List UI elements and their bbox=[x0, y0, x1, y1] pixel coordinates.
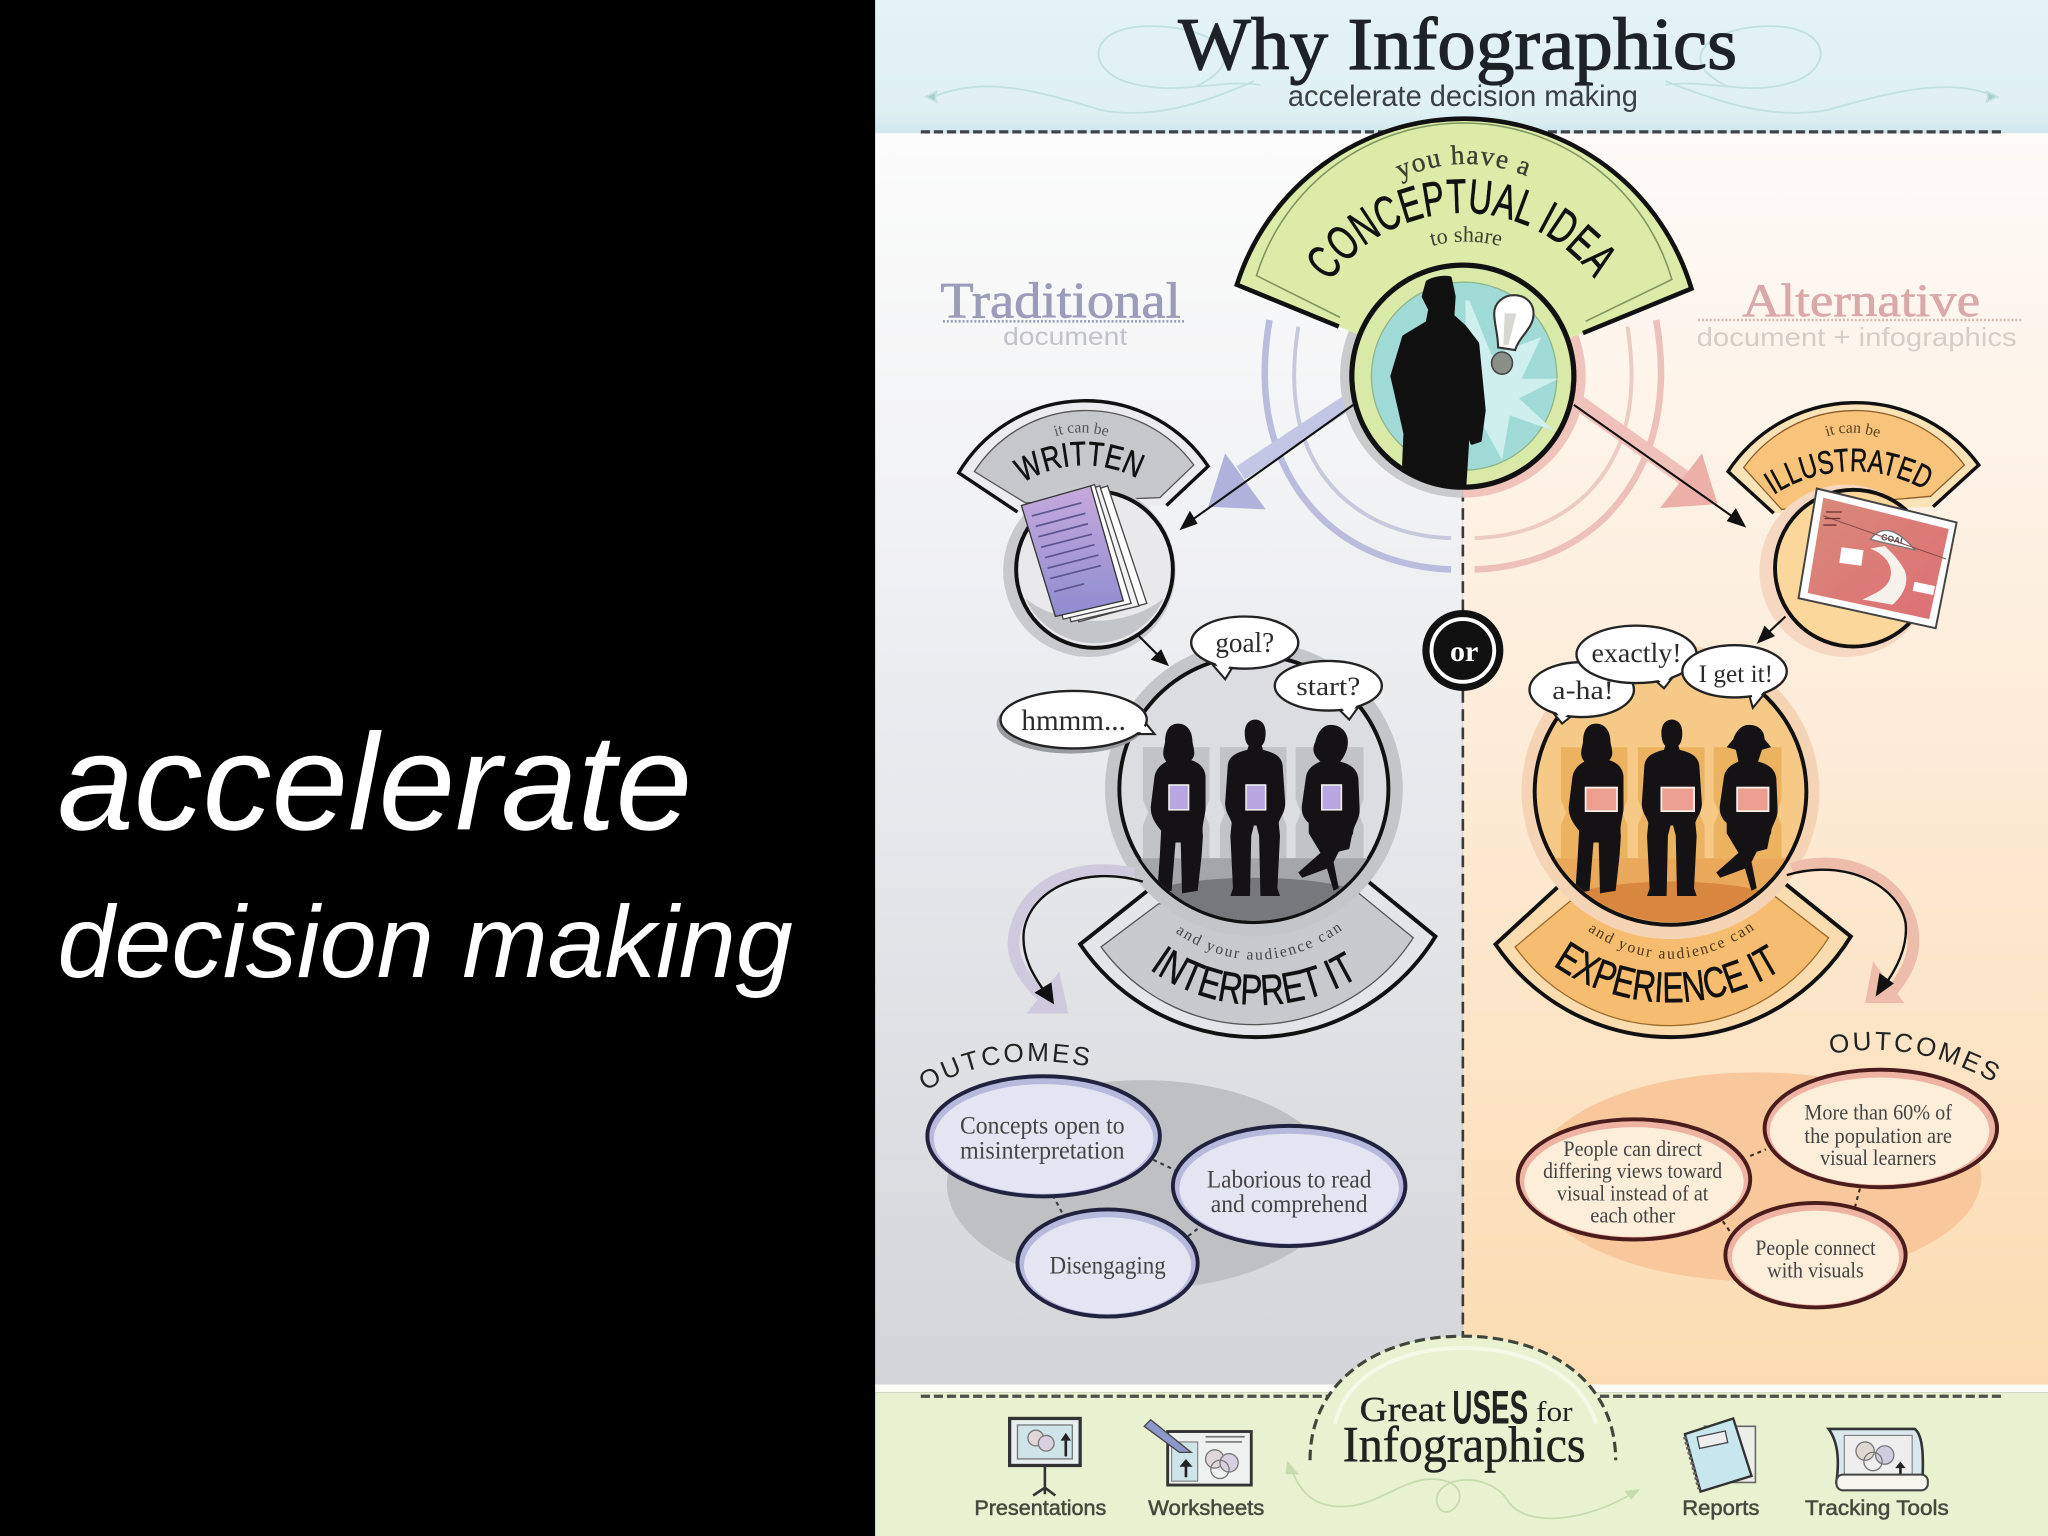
chairs bbox=[1143, 747, 1364, 858]
audience silhouettes bbox=[1151, 720, 1360, 896]
oval: people can direct: People can direct bbox=[1563, 1136, 1703, 1161]
slide caption bbox=[57, 706, 793, 999]
text: you have a: you have a bbox=[1395, 145, 1529, 184]
oval: people connect: People connect bbox=[1755, 1235, 1876, 1260]
oval: laborious to read: Laborious to read bbox=[1207, 1166, 1372, 1193]
text: written: WRITTEN bbox=[1012, 441, 1145, 480]
panel: traditional audience bbox=[1105, 641, 1403, 936]
text: experience it: EXPERIENCE IT bbox=[1554, 941, 1776, 1003]
oval: more than 60 percent bbox=[1765, 1070, 1997, 1187]
bottom dashed divider bbox=[921, 1395, 2001, 1397]
curved arrow: experience to outcomes bbox=[1787, 863, 1913, 1003]
label: presentations: Presentations bbox=[974, 1497, 1106, 1520]
bubble: hmmm: hmmm... bbox=[1021, 704, 1126, 737]
icon: worksheets bbox=[1144, 1420, 1251, 1485]
arrow: idea to illustrated bbox=[1574, 405, 1746, 528]
medallion: person with idea bbox=[1352, 265, 1574, 490]
arrow: written to audience bbox=[1139, 636, 1169, 666]
heading: traditional: document bbox=[1003, 324, 1127, 351]
arch: great uses bbox=[1310, 1336, 1616, 1536]
oval: more than 60 percent: More than 60% of bbox=[1804, 1099, 1953, 1124]
header swirl decoration bbox=[926, 26, 1998, 113]
oval: laborious to read: and comprehend bbox=[1211, 1191, 1368, 1218]
icon: reports bbox=[1685, 1418, 1755, 1492]
arrow: idea to written bbox=[1179, 405, 1353, 530]
bubble: start: start? bbox=[1296, 672, 1360, 701]
bubble: i get it bbox=[1682, 645, 1787, 708]
bubble: goal bbox=[1191, 616, 1298, 679]
heading: traditional bbox=[940, 273, 1185, 351]
text: it can be: it can be bbox=[1825, 423, 1880, 437]
banner: interpret it bbox=[1080, 878, 1435, 1037]
panel: traditional outcomes bbox=[927, 1076, 1405, 1317]
banner text: interpret it bbox=[1152, 924, 1352, 1006]
oval: concepts open to misinterpretation: Concepts open to bbox=[960, 1113, 1125, 1140]
bubble: i get it: I get it! bbox=[1699, 661, 1773, 688]
bubble: goal: goal? bbox=[1215, 627, 1274, 659]
chairs bbox=[1561, 747, 1782, 858]
icon: presentations bbox=[1010, 1418, 1080, 1496]
curved arrow: interpret to outcomes bbox=[1013, 870, 1143, 1014]
panel: alternative outcomes bbox=[1518, 1070, 1997, 1307]
text: illustrated: ILLUSTRATED bbox=[1763, 448, 1932, 494]
bubble: hmmm bbox=[997, 691, 1155, 754]
concentric arcs and wide arrows bbox=[1208, 320, 1718, 569]
audience silhouettes bbox=[1569, 720, 1778, 896]
label: worksheets: Worksheets bbox=[1148, 1497, 1264, 1520]
banner text: experience it bbox=[1554, 924, 1776, 1003]
text: conceptual idea: CONCEPTUAL IDEA bbox=[1308, 179, 1614, 279]
infographic background bbox=[875, 0, 2048, 1536]
label: outcomes right: OUTCOMES bbox=[1830, 1032, 1999, 1080]
oval: concepts open to misinterpretation: misinterpretation bbox=[960, 1138, 1125, 1165]
text: it can be: it can be bbox=[1054, 422, 1108, 436]
oval: laborious to read bbox=[1173, 1126, 1405, 1246]
fan: conceptual idea bbox=[1234, 116, 1694, 338]
heading: great uses for infographics: Infographics bbox=[1343, 1418, 1586, 1474]
or badge bbox=[1422, 610, 1503, 691]
oval: people can direct: visual instead of at bbox=[1557, 1180, 1709, 1205]
text: and your audience can: and your audience can bbox=[1588, 924, 1754, 959]
oval: more than 60 percent: the population are bbox=[1804, 1123, 1952, 1148]
top dashed divider bbox=[921, 131, 2001, 133]
centre vertical dashed divider bbox=[1462, 490, 1464, 1343]
slide caption: decision making bbox=[57, 885, 793, 999]
heading: alternative: document + infographics bbox=[1697, 322, 2017, 352]
subtitle: accelerate decision making bbox=[1288, 80, 1638, 113]
icon: man silhouette bbox=[1392, 278, 1484, 490]
oval: disengaging bbox=[1017, 1209, 1198, 1317]
oval: concepts open to misinterpretation bbox=[927, 1076, 1160, 1196]
panel: alternative audience bbox=[1522, 644, 1819, 939]
bubble: a-ha: a-ha! bbox=[1552, 676, 1614, 705]
text: to share: to share bbox=[1430, 226, 1502, 246]
or badge: or bbox=[1450, 635, 1478, 668]
heading: great uses for infographics: Great bbox=[1360, 1390, 1446, 1429]
text: interpret it: INTERPRET IT bbox=[1152, 946, 1352, 1006]
oval: people can direct: differing views toward bbox=[1543, 1158, 1722, 1183]
oval: people connect: with visuals bbox=[1767, 1257, 1864, 1282]
text: and your audience can: and your audience can bbox=[1176, 924, 1342, 960]
heading: traditional: Traditional bbox=[940, 273, 1181, 329]
arrow: illustrated to audience bbox=[1757, 616, 1785, 644]
bubble: exactly: exactly! bbox=[1592, 638, 1682, 668]
banner: experience it bbox=[1496, 878, 1851, 1037]
bubble: exactly bbox=[1576, 626, 1697, 688]
bubble: a-ha bbox=[1529, 662, 1634, 724]
slide caption: accelerate bbox=[57, 706, 692, 859]
heading: great uses for infographics: for bbox=[1536, 1396, 1573, 1428]
oval: people connect bbox=[1725, 1203, 1906, 1307]
oval: people can direct: each other bbox=[1590, 1203, 1676, 1228]
medallion shadow ring bbox=[1340, 255, 1586, 498]
oval: more than 60 percent: visual learners bbox=[1820, 1145, 1936, 1170]
laptops bbox=[1586, 788, 1768, 811]
icon: starburst bbox=[1465, 300, 1558, 460]
handouts bbox=[1169, 785, 1341, 810]
title: Why Infographics bbox=[1178, 4, 1737, 86]
label: tracking tools: Tracking Tools bbox=[1805, 1497, 1949, 1520]
heading: alternative: Alternative bbox=[1742, 275, 1980, 327]
icon: light bulb bbox=[1492, 295, 1534, 374]
heading: alternative bbox=[1697, 275, 2022, 352]
left black panel bbox=[0, 0, 875, 1536]
heading: great uses for infographics: USES bbox=[1452, 1381, 1528, 1434]
bubble: start bbox=[1275, 661, 1382, 720]
icon: tracking tools bbox=[1829, 1429, 1928, 1490]
heading: great uses for infographics bbox=[1343, 1381, 1586, 1474]
label: reports: Reports bbox=[1682, 1497, 1759, 1520]
icon: illustrated map card bbox=[1799, 488, 1957, 628]
label: outcomes left: OUTCOMES bbox=[920, 1043, 1090, 1088]
oval: people can direct bbox=[1518, 1119, 1750, 1240]
panel: written bbox=[956, 399, 1210, 657]
footer swirl decoration bbox=[1287, 1463, 1638, 1518]
icon: illustrated map card: GOAL bbox=[1880, 532, 1906, 547]
oval: disengaging: Disengaging bbox=[1049, 1252, 1166, 1279]
panel: illustrated bbox=[1726, 401, 1981, 657]
icon: document pages bbox=[1021, 485, 1147, 622]
